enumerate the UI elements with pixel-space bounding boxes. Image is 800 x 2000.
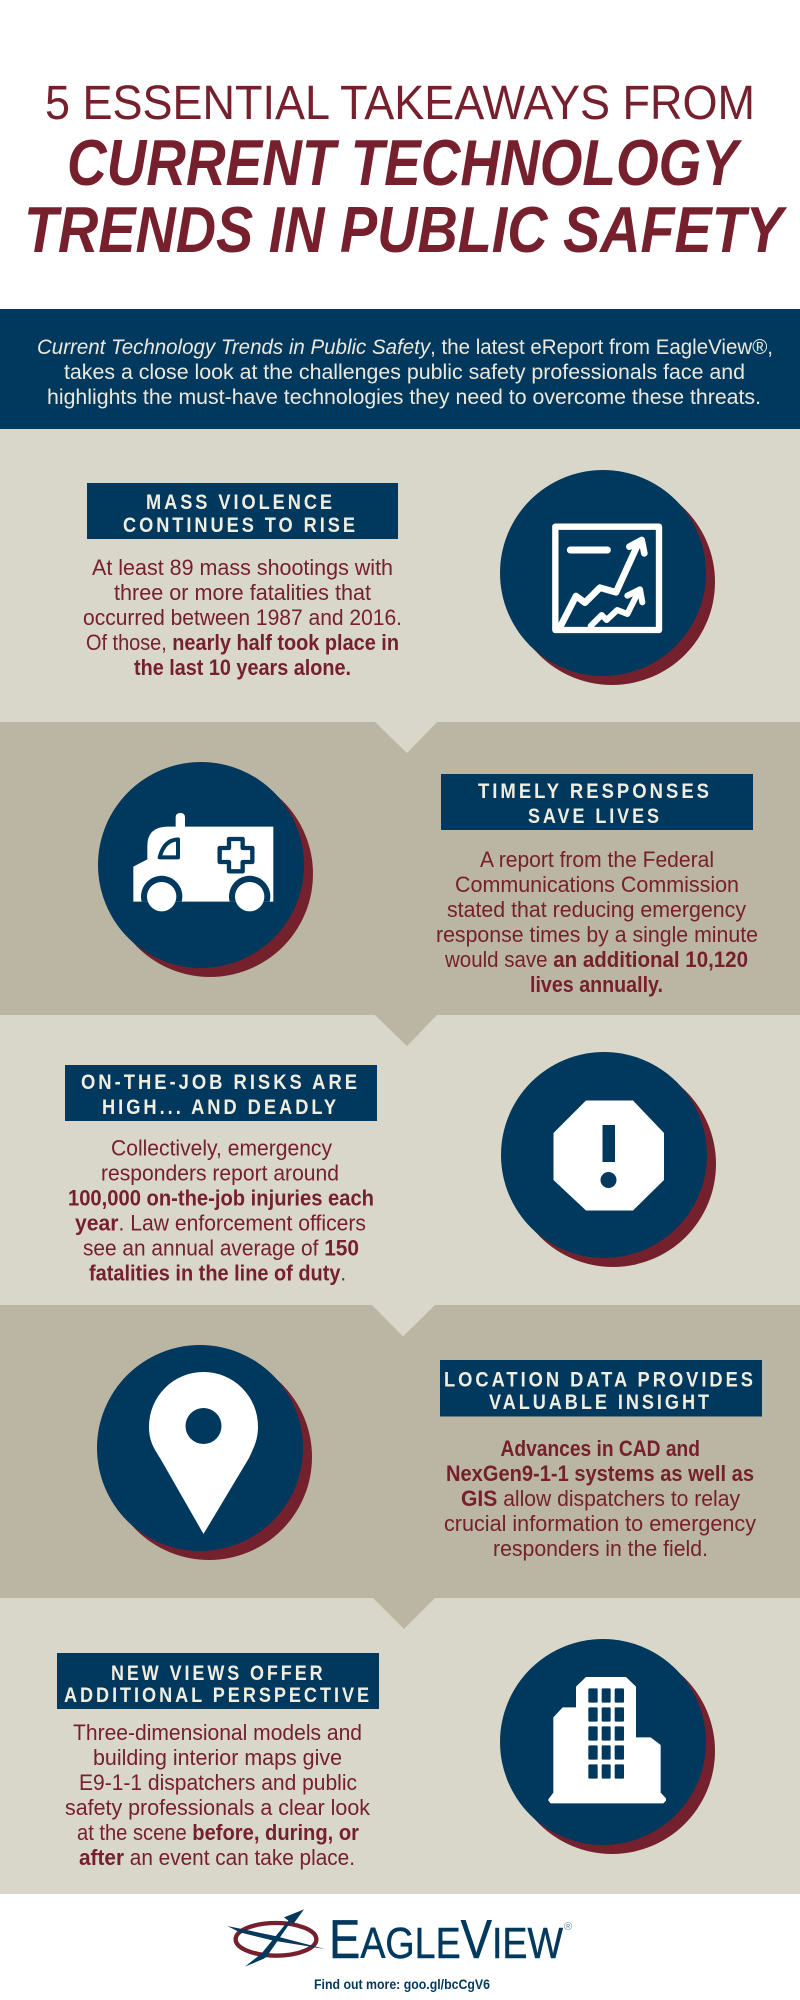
text block: timely responses: lives annually. [530, 972, 663, 997]
title [24, 77, 788, 266]
heading: on-the-job risks: ON-THE-JOB RISKS ARE [81, 1070, 360, 1094]
heading: new views: NEW VIEWS OFFER [111, 1661, 326, 1685]
heading: timely responses: TIMELY RESPONSES [478, 779, 712, 803]
text block: new views: E9-1-1 dispatchers and public [79, 1770, 357, 1795]
text block: on-the-job risks [68, 1136, 374, 1286]
text block: on-the-job risks: see an annual average of 150 [83, 1236, 359, 1260]
icon: building [500, 1639, 715, 1854]
panel: location data [0, 1305, 800, 1598]
panel: timely responses [0, 722, 800, 1015]
heading: timely responses: SAVE LIVES [528, 804, 662, 828]
footer link: Find out more: goo.gl/bcCgV6 [314, 1977, 490, 1992]
text block: location data: responders in the field. [493, 1536, 708, 1561]
text block: timely responses: A report from the Federal [480, 847, 714, 872]
heading: on-the-job risks: HIGH... AND DEADLY [102, 1095, 339, 1119]
heading: new views: ADDITIONAL PERSPECTIVE [64, 1683, 372, 1707]
icon: map pin [97, 1345, 312, 1560]
icon: warning octagon [501, 1052, 716, 1267]
text block: new views: at the scene before, during, or [77, 1820, 359, 1845]
footer logo: EagleView: ® [564, 1921, 572, 1933]
text block: new views: after an event can take place. [79, 1845, 355, 1870]
footer logo: EagleView: EAGLEVIEW [329, 1908, 563, 1970]
text block: new views [65, 1720, 371, 1870]
heading: location data [440, 1360, 762, 1416]
text block: mass violence: At least 89 mass shootings with [92, 555, 393, 580]
panel: on-the-job risks [0, 1015, 800, 1305]
title: 5 ESSENTIAL TAKEAWAYS FROM [45, 77, 755, 130]
text block: location data: crucial information to emergency [444, 1511, 756, 1536]
icon: rising chart [500, 470, 715, 685]
text block: mass violence [83, 555, 402, 680]
arrow: section pointer [373, 1598, 435, 1629]
heading: mass violence: CONTINUES TO RISE [123, 513, 358, 537]
panel: new views [0, 1598, 800, 1894]
text block: on-the-job risks: year. Law enforcement officers [75, 1210, 366, 1236]
text block: timely responses: would save an additional 10,120 [444, 947, 748, 972]
text block: mass violence: Of those, nearly half took place in [86, 630, 399, 655]
text block: timely responses: response times by a single minute [436, 922, 758, 947]
text block: on-the-job risks: 100,000 on-the-job injuries each [68, 1186, 374, 1210]
text block: new views: safety professionals a clear look [65, 1795, 371, 1820]
heading: location data: LOCATION DATA PROVIDES [444, 1368, 756, 1392]
icon: ambulance [98, 762, 313, 977]
footer logo: EagleView [227, 1908, 572, 1970]
arrow: section pointer [372, 1305, 435, 1336]
text block: on-the-job risks: fatalities in the line of duty. [89, 1260, 346, 1286]
text block: mass violence: three or more fatalities that [114, 580, 371, 605]
text block: location data: NexGen9-1-1 systems as well as [446, 1461, 754, 1486]
heading: timely responses [441, 774, 753, 830]
text block: timely responses: stated that reducing emergency [447, 897, 746, 922]
panel: intro band: Current Technology Trends in Public Safety, the latest eReport from EagleView®, [37, 335, 773, 359]
panel: intro band: takes a close look at the challenges public safety professionals face and [64, 360, 745, 384]
text block: mass violence: the last 10 years alone. [134, 655, 351, 680]
heading: mass violence [87, 483, 398, 539]
arrow: section pointer [375, 1015, 437, 1046]
text block: location data [444, 1436, 756, 1561]
heading: new views [57, 1653, 379, 1709]
arrow: section pointer [375, 722, 437, 753]
text block: timely responses: Communications Commission [455, 872, 739, 897]
text block: location data: GIS allow dispatchers to relay [461, 1486, 740, 1511]
text block: timely responses [436, 847, 758, 997]
text block: on-the-job risks: responders report around [101, 1160, 339, 1186]
text block: mass violence: occurred between 1987 and 2016. [83, 605, 402, 630]
heading: on-the-job risks [65, 1065, 377, 1121]
heading: mass violence: MASS VIOLENCE [146, 490, 335, 514]
text block: new views: building interior maps give [93, 1745, 342, 1770]
panel: mass violence [0, 429, 800, 722]
heading: location data: VALUABLE INSIGHT [489, 1390, 712, 1414]
panel: intro band: highlights the must-have technologies they need to overcome these threats. [47, 385, 761, 409]
panel: intro band [0, 309, 800, 429]
text block: new views: Three-dimensional models and [73, 1720, 362, 1745]
text block: on-the-job risks: Collectively, emergency [111, 1136, 332, 1160]
text block: location data: Advances in CAD and [500, 1436, 700, 1461]
